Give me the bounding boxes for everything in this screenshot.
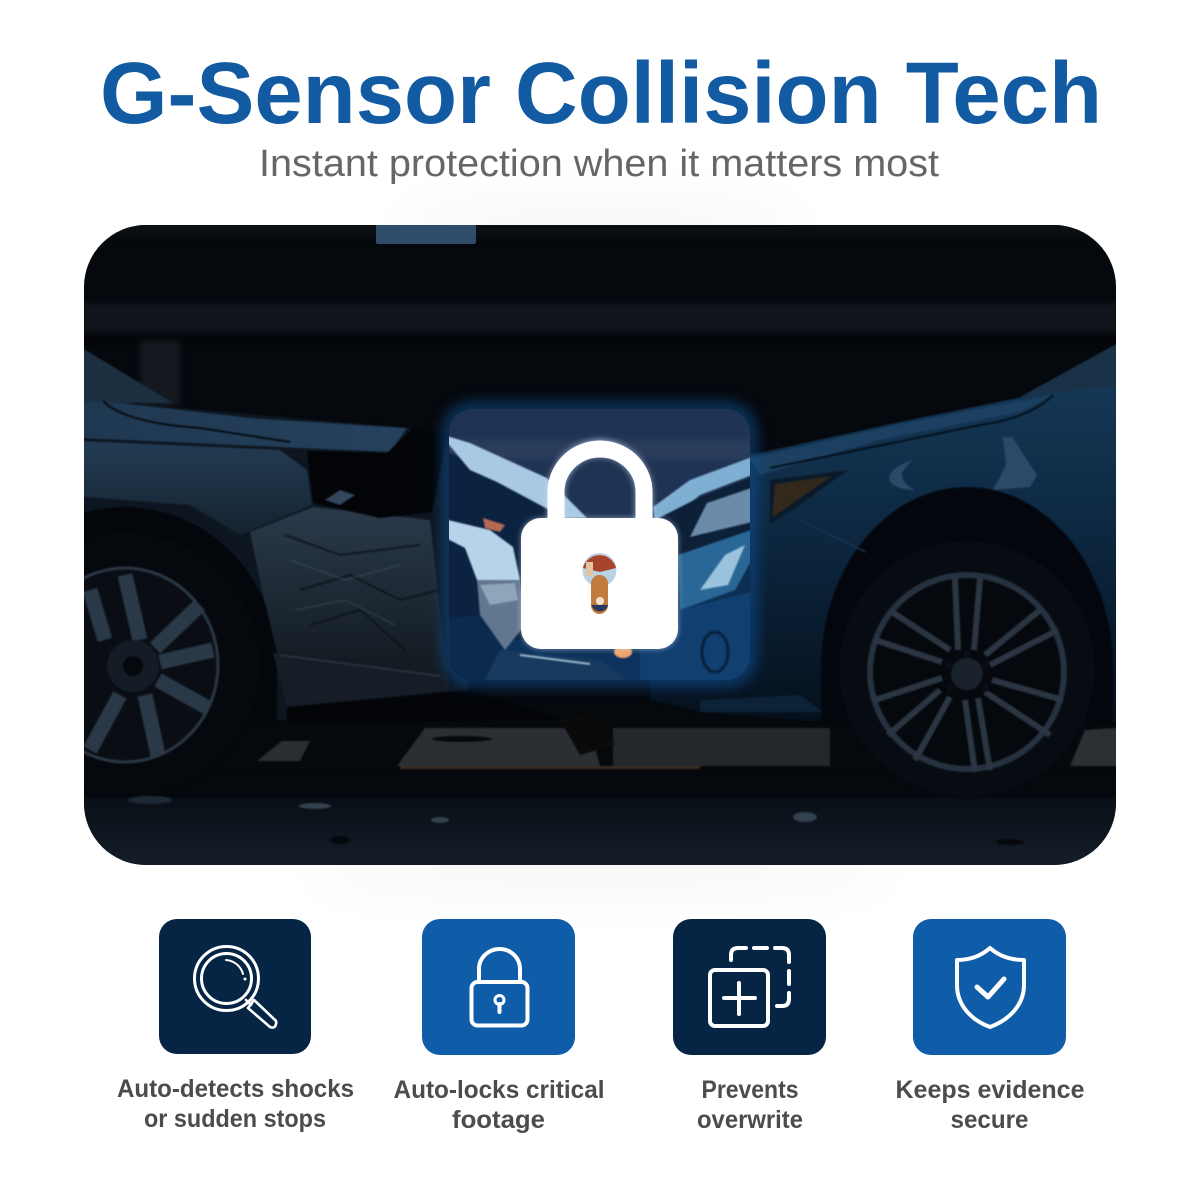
icon tile: shield — [913, 919, 1066, 1055]
sidewalk — [258, 728, 1116, 770]
label: keeps evidence: Keeps evidence — [896, 1076, 1085, 1104]
label: prevents overwrite: overwrite — [697, 1106, 803, 1134]
label: keeps evidence: secure — [950, 1106, 1029, 1134]
keyhole — [582, 553, 616, 614]
feature 4: evidence secure — [896, 919, 1085, 1134]
glow around highlighted window — [449, 409, 750, 680]
icon tile: padlock — [422, 919, 575, 1055]
icon tile: magnifying glass — [159, 919, 311, 1054]
street sign — [376, 225, 476, 244]
label: auto-locks: Auto-locks critical — [394, 1076, 604, 1104]
feature 2: auto-lock — [394, 919, 604, 1134]
label: auto-locks: footage — [452, 1106, 545, 1134]
wall bands — [84, 225, 1116, 406]
soft background shadow — [300, 198, 900, 896]
icon tile: layered squares — [673, 919, 826, 1055]
left damaged car — [84, 348, 469, 720]
feature 3: prevents overwrite — [673, 919, 826, 1134]
scene background wall — [84, 225, 1116, 865]
right blue car — [650, 344, 1116, 722]
highlighted window with bright crash close-up — [449, 409, 750, 680]
right wheel — [866, 571, 1068, 774]
panel: crash photo scene — [84, 225, 1116, 865]
label: auto-detects: or sudden stops — [144, 1105, 326, 1133]
road surface — [84, 796, 1116, 865]
feature 1: auto-detect — [117, 919, 354, 1133]
subtitle: Instant protection when it matters most — [259, 143, 939, 185]
label: prevents overwrite: Prevents — [702, 1076, 798, 1104]
large padlock — [521, 448, 678, 649]
left wheel — [84, 566, 220, 764]
label: auto-detects: Auto-detects shocks — [117, 1075, 354, 1103]
title: G-Sensor Collision Tech — [100, 45, 1102, 142]
